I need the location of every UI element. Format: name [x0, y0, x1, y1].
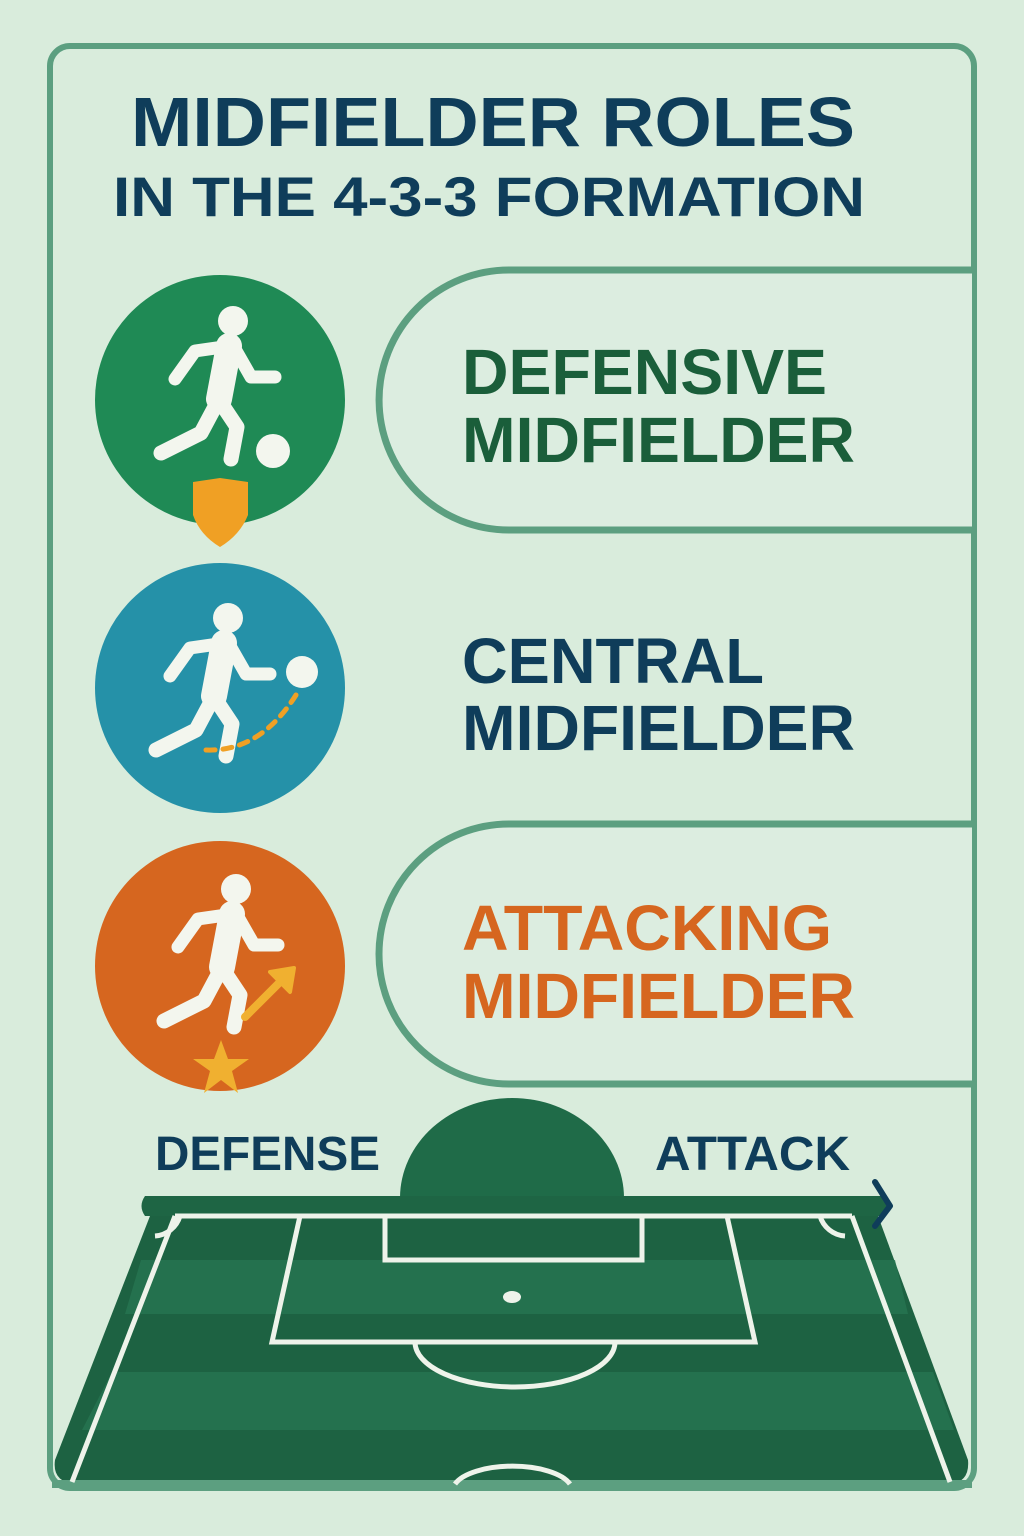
label: attack: ATTACK: [655, 1128, 850, 1181]
label: attacking midfielder: [462, 892, 855, 1032]
icon: attacking midfielder: [95, 841, 345, 1093]
title: IN THE 4-3-3 FORMATION: [113, 165, 865, 228]
label: defense: DEFENSE: [155, 1128, 380, 1181]
pitch: [52, 1098, 972, 1484]
label: attacking midfielder: ATTACKING: [462, 892, 832, 964]
label: central midfielder: MIDFIELDER: [462, 692, 855, 764]
pill: attacking: [379, 824, 972, 1084]
pill: defensive: [379, 270, 972, 530]
title: MIDFIELDER ROLES: [131, 83, 855, 161]
arrow: [875, 1182, 890, 1226]
label: defensive midfielder: DEFENSIVE: [462, 336, 827, 408]
icon: central midfielder: [95, 563, 345, 813]
label: central midfielder: [462, 625, 855, 764]
icon: defensive midfielder: [95, 275, 345, 547]
title: [113, 83, 865, 228]
label: central midfielder: CENTRAL: [462, 625, 764, 697]
label: defensive midfielder: [462, 336, 855, 476]
label: attacking midfielder: MIDFIELDER: [462, 960, 855, 1032]
label: defensive midfielder: MIDFIELDER: [462, 404, 855, 476]
